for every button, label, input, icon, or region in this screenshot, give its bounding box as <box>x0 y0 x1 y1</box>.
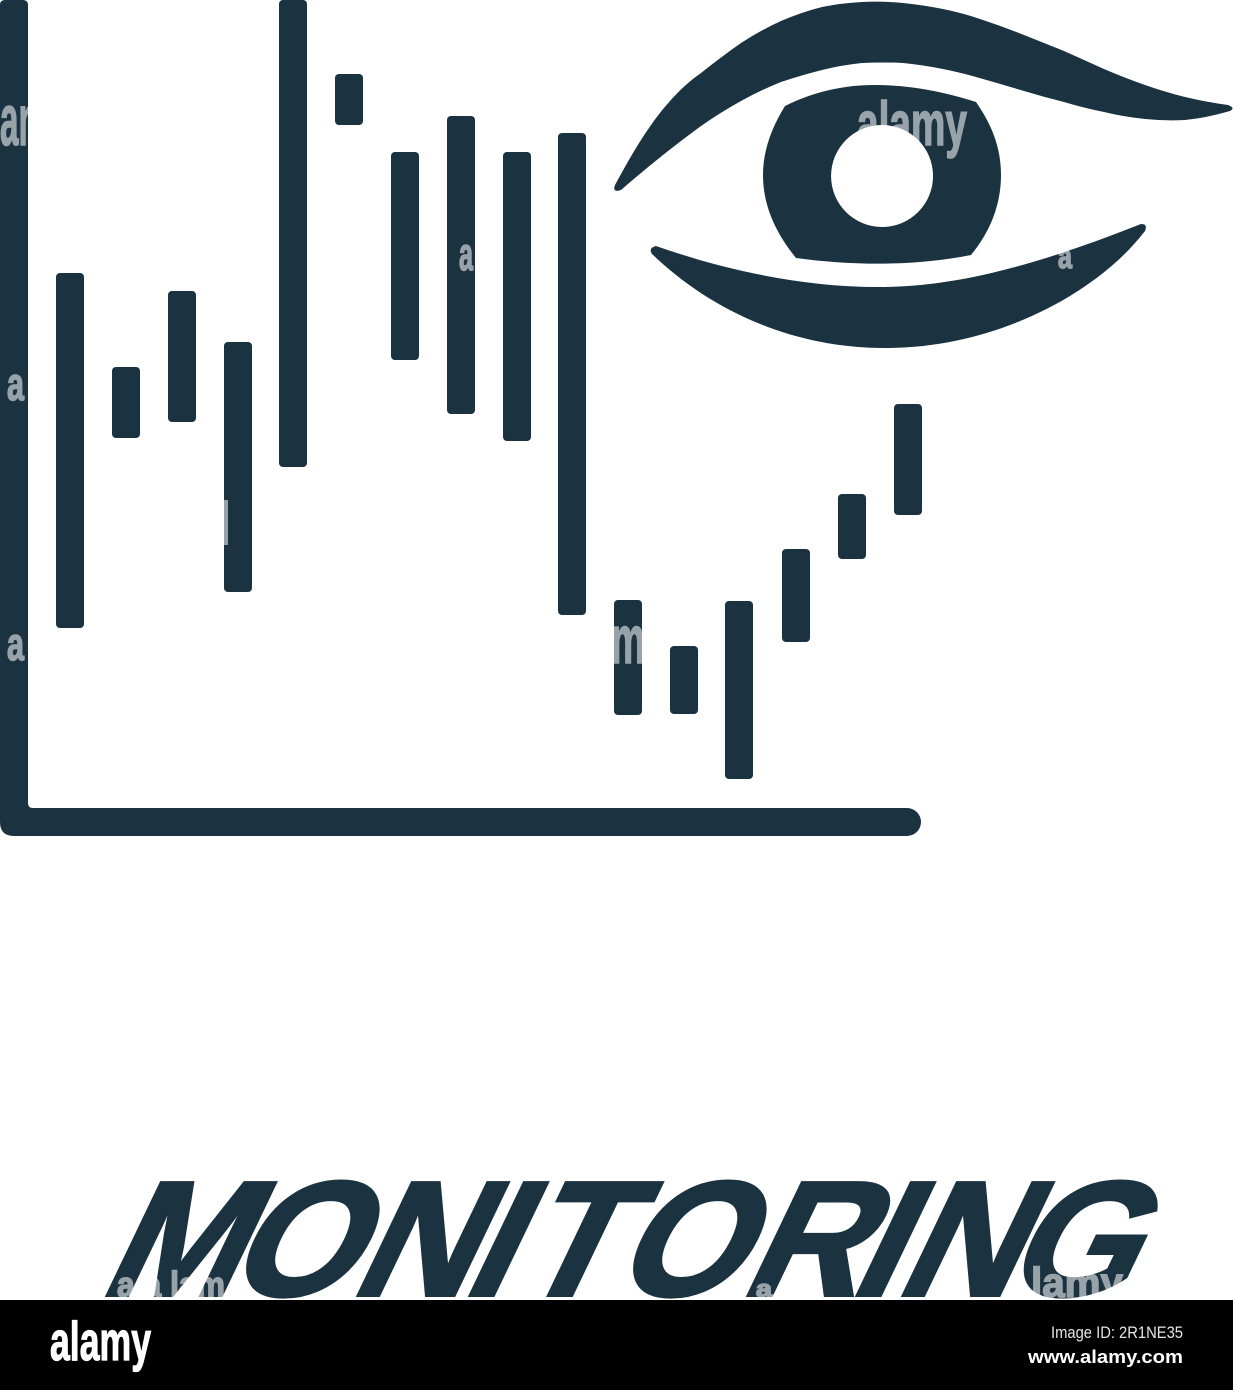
watermark marks: lamy <box>1031 1259 1124 1306</box>
watermark marks: a <box>7 618 24 670</box>
watermark marks: alamy <box>857 90 967 159</box>
eyebrow / upper lid <box>614 2 1233 191</box>
watermark marks: m <box>611 602 645 678</box>
footer logo: alamy: alamy <box>50 1310 151 1372</box>
chart axes <box>0 0 921 836</box>
footer website: www.alamy.com <box>1027 1347 1183 1367</box>
candlestick bars <box>56 0 922 779</box>
watermark marks: a <box>1058 238 1073 276</box>
footer image id: Image ID: 2R1NE35 <box>1051 1323 1183 1342</box>
footer bar <box>0 1300 1233 1390</box>
watermark marks: am <box>0 81 48 161</box>
watermark marks: a <box>459 228 473 280</box>
watermark marks: a <box>756 1276 773 1303</box>
title: MONITORING: MONITORING <box>79 1147 1199 1331</box>
iris <box>763 85 1001 264</box>
watermark marks: a <box>7 358 24 410</box>
watermark marks: a a lam <box>117 1264 225 1305</box>
lower lid <box>651 224 1146 348</box>
icon: eye <box>614 2 1233 348</box>
